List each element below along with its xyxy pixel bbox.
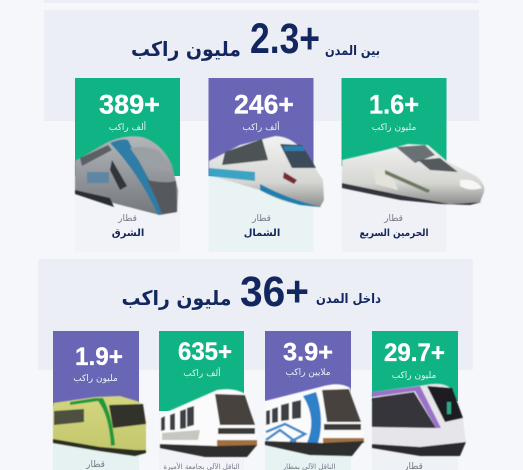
heading: intercity passengers: مليون راكب [131, 37, 241, 61]
label: Sharq train [112, 214, 144, 239]
icon: Haramain train [342, 144, 484, 205]
label: Haramain train: قطار [383, 214, 403, 224]
heading: urban passengers: مليون راكب [122, 286, 232, 310]
heading: urban passengers: 36+ [240, 268, 309, 316]
card: Makkah-Madinah metro [53, 331, 146, 470]
heading: urban passengers: داخل المدن [316, 292, 381, 307]
label: Sharq train: قطار [117, 214, 137, 224]
icon: blue and white people mover [265, 384, 365, 456]
heading: urban passengers [122, 268, 381, 316]
unit: thousand passengers: ألف راكب [242, 121, 280, 133]
value: 3.9 million: 3.9+ [283, 338, 333, 366]
card: university people mover [159, 331, 257, 470]
heading: intercity passengers: بين المدن [325, 44, 380, 59]
unit: million passengers: مليون راكب [392, 371, 436, 381]
icon: white people mover [160, 389, 257, 457]
label: Haramain train [360, 214, 428, 239]
unit: thousand passengers: ألف راكب [183, 367, 221, 379]
panel: within cities [38, 259, 473, 370]
icon: Shamal train [209, 136, 324, 207]
label: Shamal train [244, 214, 280, 239]
icon: Sharq train [75, 136, 178, 215]
card: Shamal train [208, 78, 324, 252]
value: 1.6 million: 1.6+ [369, 90, 419, 120]
value: 1.9 million: 1.9+ [75, 343, 123, 371]
unit: thousand passengers: ألف راكب [109, 121, 146, 133]
label: train: قطار [85, 460, 105, 470]
heading: intercity passengers: 2.3+ [250, 15, 320, 63]
card: Sharq train [75, 78, 180, 252]
label: Shamal train: قطار [251, 214, 271, 224]
value: 246 thousand: 246+ [234, 90, 294, 120]
unit: million passengers: مليون راكب [73, 374, 118, 384]
value: 635 thousand: 635+ [178, 338, 232, 366]
card: airport people mover [265, 331, 365, 470]
icon: green train [53, 396, 146, 456]
card: Haramain train [342, 78, 484, 252]
unit: million passengers: مليون راكب [372, 123, 416, 133]
top strip panel [44, 0, 479, 3]
card: Riyadh metro [372, 331, 466, 470]
heading: intercity passengers [131, 15, 380, 63]
label: Haramain train: الحرمين السريع [360, 228, 428, 239]
value: 389 thousand: 389+ [99, 90, 160, 120]
value: 29.7 million: 29.7+ [384, 339, 445, 367]
label: Shamal train: الشمال [244, 228, 280, 239]
panel: intercity [44, 10, 479, 121]
unit: million passengers: ملايين راكب [285, 368, 331, 378]
icon: purple metro [372, 384, 466, 456]
label: Sharq train: الشرق [112, 228, 144, 239]
